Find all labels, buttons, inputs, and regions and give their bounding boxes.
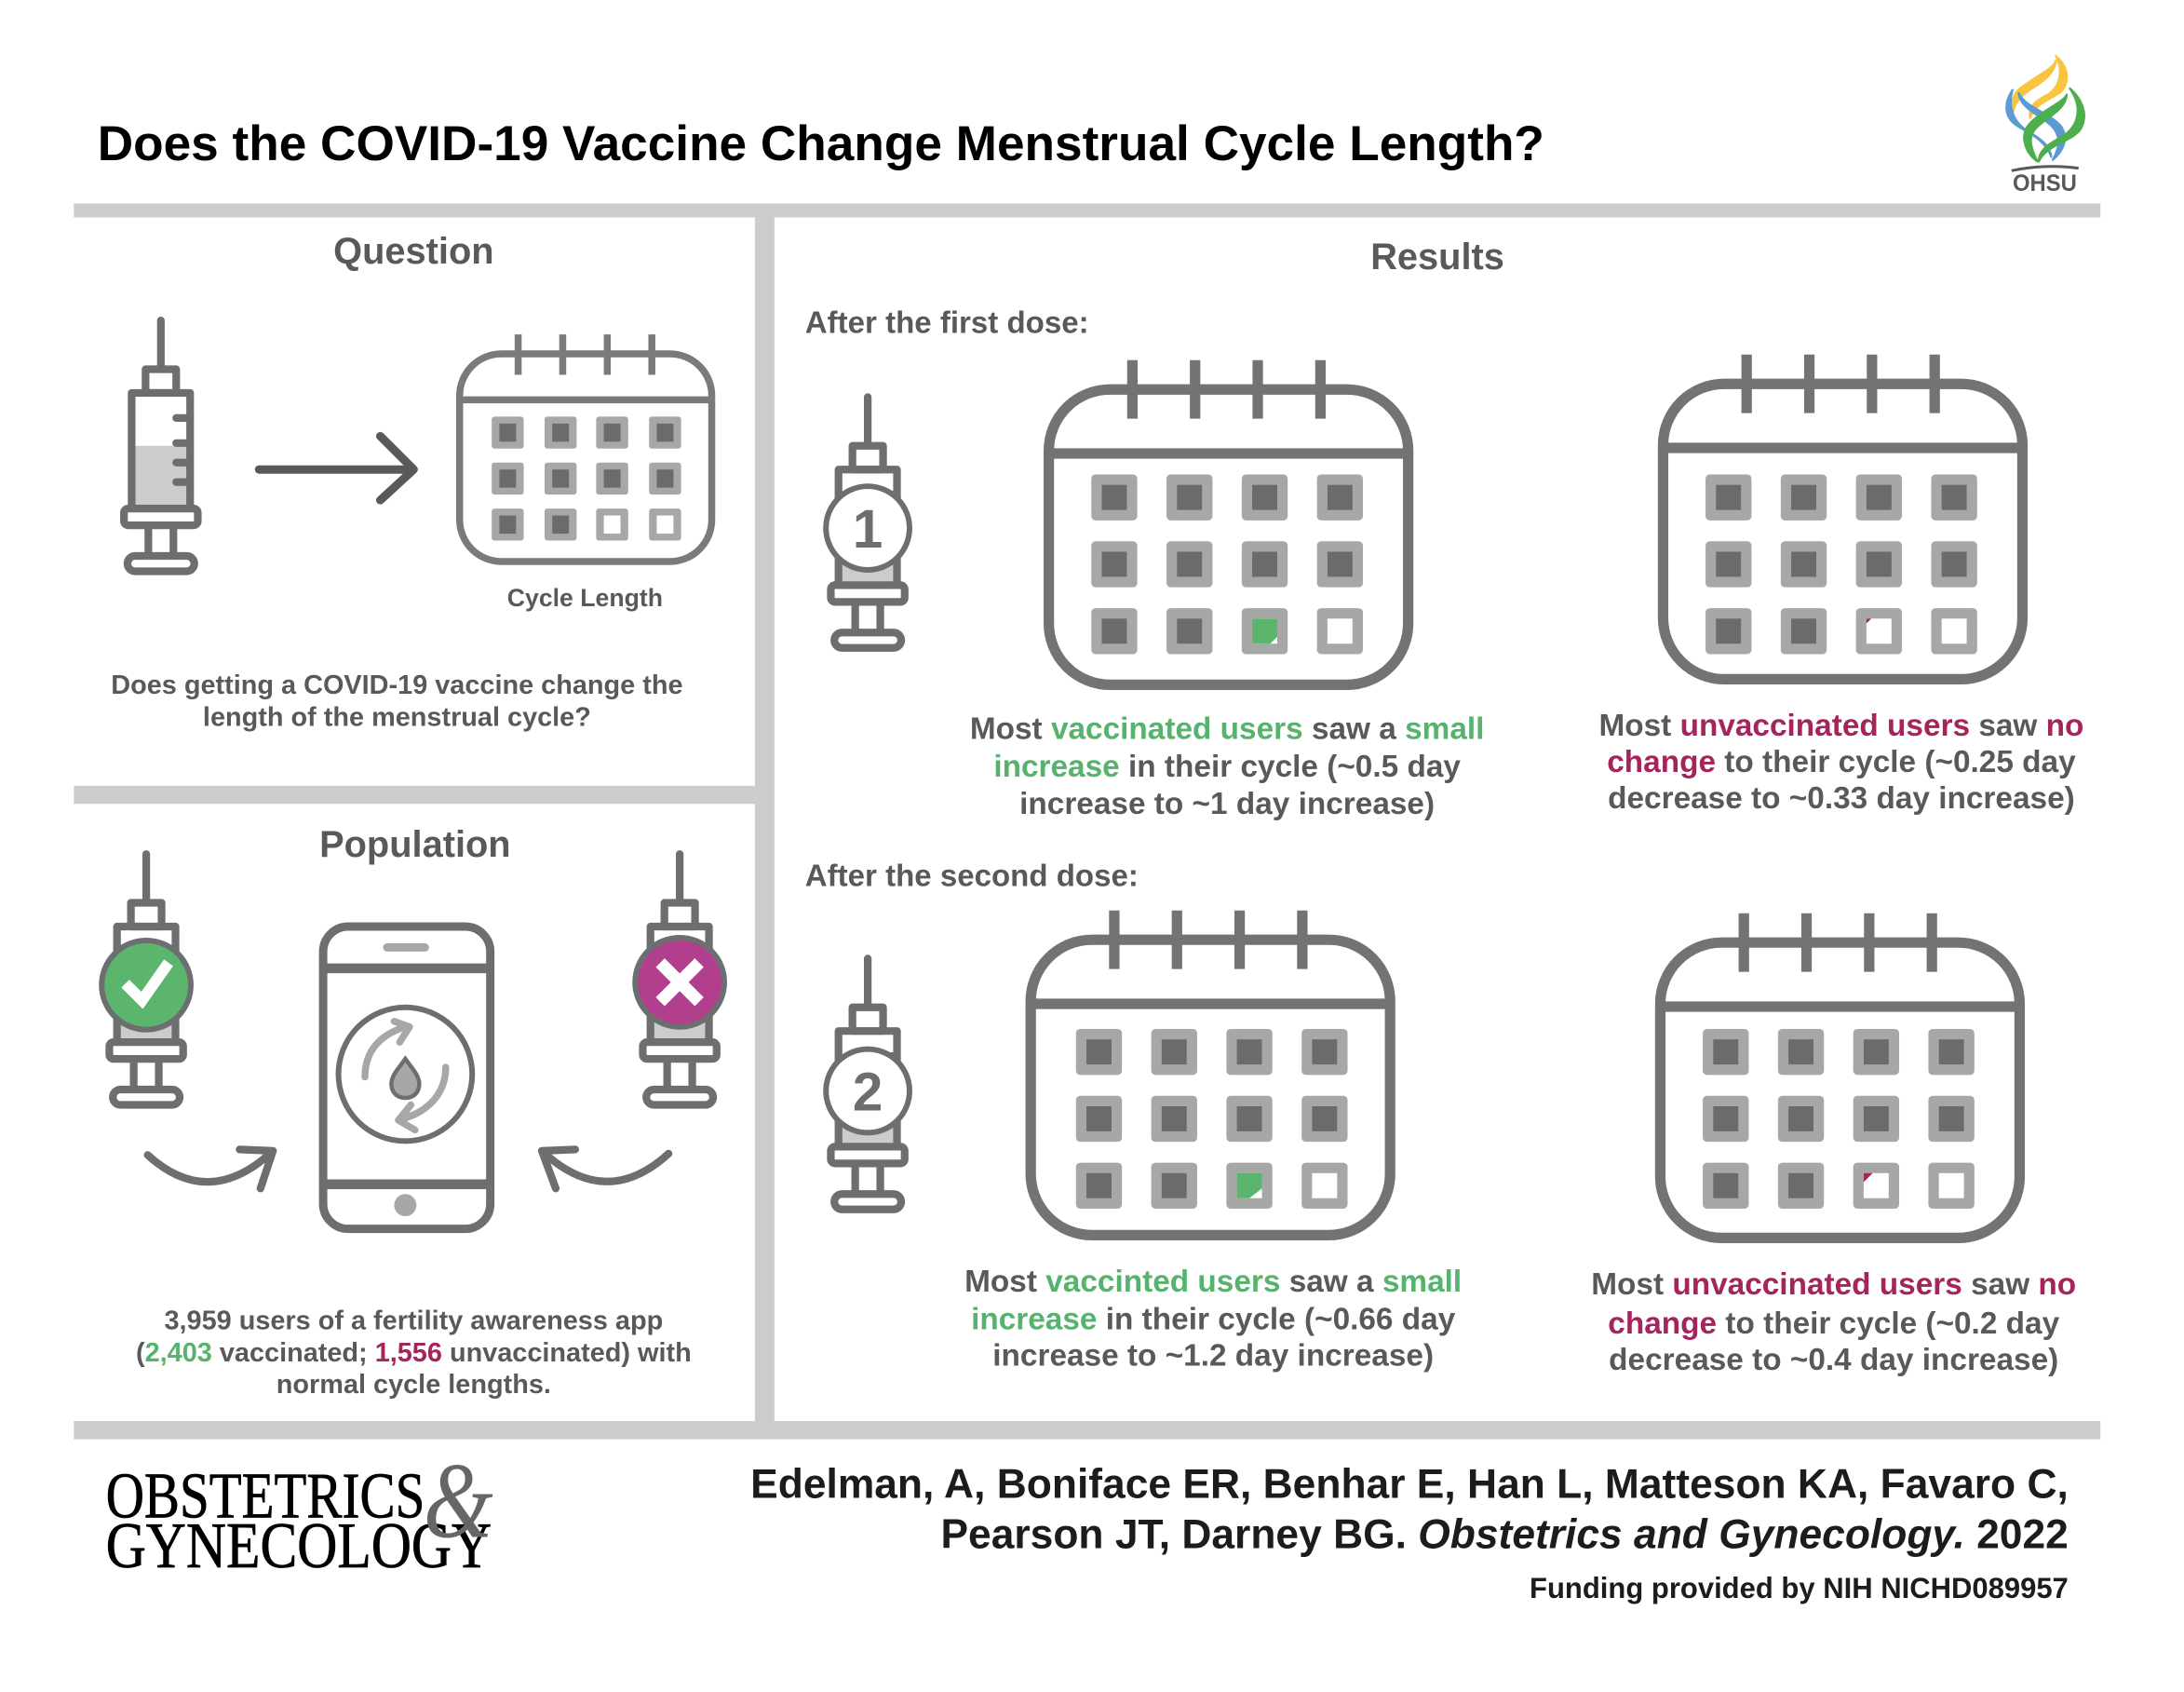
result text: vaccinated second dose: Most vaccinted users saw a small [964,1265,1462,1299]
icon: unvaccinated syringe [635,854,724,1104]
result text: unvaccinated second dose: change to their cycle (~0.2 day [1608,1306,2060,1341]
label: cycle length: Cycle Length [507,584,663,612]
panel: question [111,231,712,733]
question text: Does getting a COVID-19 vaccine change the [111,670,683,700]
citation: Edelman, A, Boniface ER, Benhar E, Han L, Matteson KA, Favaro C, [750,1461,2069,1507]
result text: unvaccinated first dose: decrease to ~0.33 day increase) [1608,781,2075,816]
result text: unvaccinated second dose: Most unvaccinated users saw no [1591,1267,2076,1302]
arrow: right curved [542,1149,668,1188]
title: Does the COVID-19 Vaccine Change Menstrual Cycle Length? [98,116,1544,171]
calendar: unvaccinated first dose [1663,355,2022,679]
OHSU logo: OHSU [2013,171,2077,196]
result text: vaccinated second dose: increase in their cycle (~0.66 day [971,1302,1456,1336]
journal logo [106,1441,493,1582]
icon: syringe [124,320,197,571]
heading: results: Results [1370,237,1504,277]
calendar: unvaccinated second dose [1660,914,2019,1238]
journal logo: OBSTETRICS [106,1459,425,1532]
result text: vaccinated first dose: increase to ~1 day increase) [1019,787,1435,821]
heading: question: Question [333,231,494,272]
result text: unvaccinated second dose [1591,1267,2076,1377]
result text: unvaccinated first dose: Most unvaccinated users saw no [1598,709,2083,743]
panel: population [101,824,724,1400]
icon: syringe dose 1: 1 [853,499,883,560]
arrow [259,436,413,500]
calendar: vaccinated first dose [1049,360,1409,684]
result text: vaccinated second dose [964,1265,1462,1373]
icon: syringe dose 1 [826,397,910,648]
panel: results [805,237,2083,1377]
result text: unvaccinated second dose: decrease to ~0.4 day increase) [1609,1343,2058,1377]
subheading: first dose: After the first dose: [805,306,1089,341]
population text: normal cycle lengths. [276,1370,551,1400]
citation: Pearson JT, Darney BG. Obstetrics and Gynecology. 2022 [940,1511,2069,1557]
icon: calendar cycle length [460,334,712,562]
result text: vaccinated first dose: Most vaccinated users saw a small [970,712,1484,747]
journal logo: & [424,1441,493,1561]
calendar: vaccinated second dose [1031,911,1390,1235]
result text: vaccinated second dose: increase to ~1.2 day increase) [992,1338,1434,1373]
result text: unvaccinated first dose: change to their cycle (~0.25 day [1607,745,2076,779]
result text: unvaccinated first dose [1598,709,2083,816]
icon: phone with cycle app [323,927,491,1229]
population text: (2,403 vaccinated; 1,556 unvaccinated) with [136,1338,692,1368]
icon: syringe dose 2: 2 [853,1062,883,1122]
result text: vaccinated first dose [970,712,1484,821]
population text [136,1306,692,1400]
question text: length of the menstrual cycle? [203,703,591,733]
subheading: second dose: After the second dose: [805,860,1139,894]
left divider [74,786,755,804]
question text [111,670,683,733]
population text: 3,959 users of a fertility awareness app [164,1306,663,1335]
heading: population: Population [319,824,511,865]
top divider [74,203,2100,217]
result text: vaccinated first dose: increase in their cycle (~0.5 day [993,750,1461,784]
vertical divider [755,217,775,1421]
bottom divider [74,1421,2100,1440]
arrow: left curved [148,1149,273,1188]
icon: vaccinated syringe [101,854,191,1104]
citation [750,1461,2069,1557]
funding note: Funding provided by NIH NICHD089957 [1530,1572,2069,1604]
journal logo: GYNECOLOGY [106,1509,492,1582]
OHSU logo [2006,56,2084,196]
icon: syringe dose 2 [826,958,910,1210]
